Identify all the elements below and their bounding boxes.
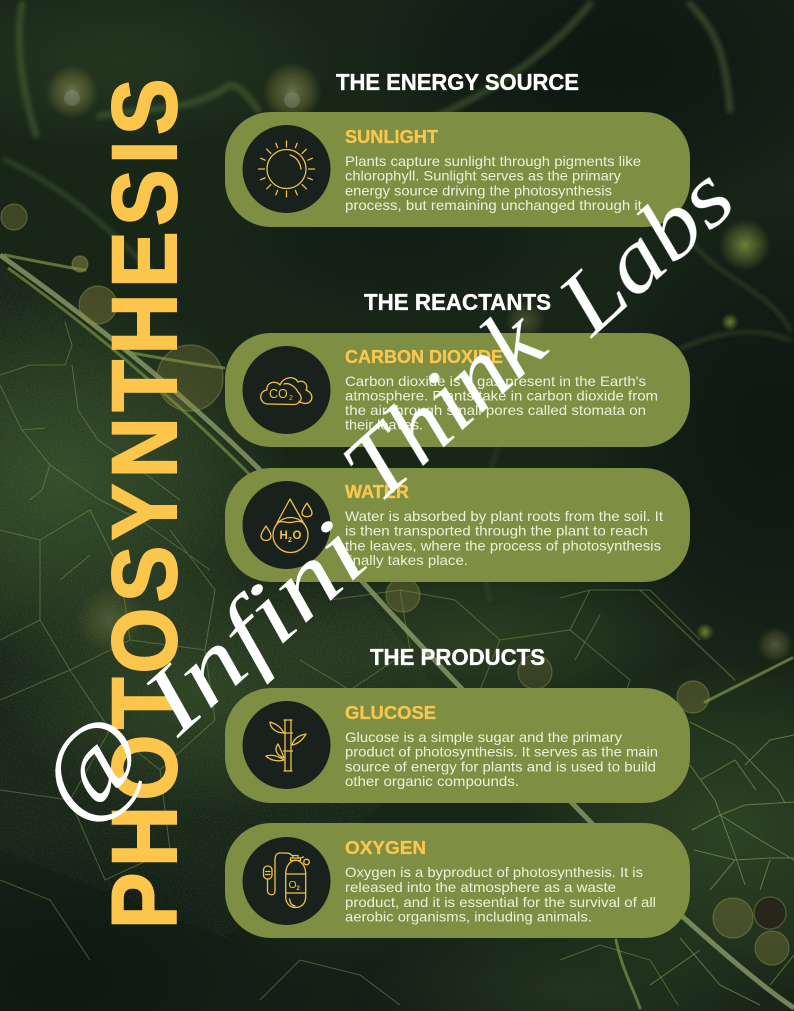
- text: glucose description: [345, 730, 658, 789]
- text: oxygen description: released into the atmosphere as a waste: [345, 880, 616, 895]
- watermark: @InfiniThink Labs: @: [14, 689, 168, 844]
- watermark: @InfiniThink Labs: Labs: [537, 147, 753, 354]
- text: oxygen description: Oxygen is a byproduct of photosynthesis. It is: [345, 865, 643, 880]
- text: carbon dioxide description: their leaves.: [345, 418, 423, 432]
- leaf veins: [0, 322, 215, 880]
- icon: CO2 cloud: [261, 378, 312, 404]
- panel: water: [225, 468, 690, 582]
- text: glucose description: Glucose is a simple sugar and the primary: [345, 730, 622, 745]
- panel: sunlight: [225, 112, 690, 227]
- heading: the products: THE PRODUCTS: [370, 644, 545, 670]
- text: glucose description: product of photosynthesis. It serves as the main: [345, 745, 658, 760]
- text: water description: [345, 509, 663, 568]
- blurred stems: [5, 4, 790, 600]
- panel: oxygen: [225, 823, 690, 938]
- stems: [5, 255, 792, 1008]
- icon: H2O drops: H: [280, 530, 288, 542]
- text: carbon dioxide description: atmosphere. Plants take in carbon dioxide from: [345, 388, 658, 404]
- heading: the energy source: THE ENERGY SOURCE: [336, 69, 579, 95]
- text: carbon dioxide description: Carbon dioxide is a gas present in the Earth's: [345, 374, 646, 389]
- label: oxygen: OXYGEN: [345, 838, 426, 858]
- text: sunlight description: chlorophyll. Sunlight serves as the primary: [345, 169, 621, 184]
- text: water description: finally takes place.: [345, 553, 468, 568]
- label: sunlight: SUNLIGHT: [345, 127, 438, 147]
- label: carbon dioxide: CARBON DIOXIDE: [345, 347, 503, 367]
- main midrib: [0, 255, 794, 1008]
- text: water description: Water is absorbed by plant roots from the soil. It: [345, 509, 663, 524]
- watermark: @InfiniThink Labs: [14, 147, 753, 844]
- icon: H2O drops: [261, 499, 312, 552]
- label: glucose: GLUCOSE: [345, 703, 436, 723]
- icon: H2O drops: O: [292, 530, 302, 542]
- text: glucose description: other organic compounds.: [345, 774, 519, 789]
- label: water: WATER: [345, 482, 409, 502]
- text: carbon dioxide description: [345, 374, 658, 432]
- text: oxygen description: [345, 865, 656, 924]
- text: oxygen description: product, and it is essential for the survival of all: [345, 895, 656, 910]
- watermark: @InfiniThink Labs: Infini: [122, 501, 387, 754]
- icon: oxygen tank: O: [288, 879, 297, 891]
- text: sunlight description: energy source driving the photosynthesis: [345, 183, 612, 198]
- title: PHOTOSYNTHESIS vertical: PHOTOSYNTHESIS: [94, 73, 196, 929]
- icon: H2O drops: 2: [288, 537, 292, 544]
- text: carbon dioxide description: the air through small pores called stomata on: [345, 403, 646, 418]
- icon: bamboo: [266, 720, 306, 771]
- heading: the reactants: THE REACTANTS: [364, 289, 551, 315]
- text: sunlight description: [345, 154, 646, 213]
- panel: carbon dioxide: [225, 333, 690, 447]
- text: sunlight description: Plants capture sunlight through pigments like: [345, 154, 641, 169]
- text: water description: is then transported through the plant to reach: [345, 524, 648, 539]
- text: water description: the leaves, where the process of photosynthesis: [345, 538, 661, 553]
- text: glucose description: source of energy for plants and is used to build: [345, 759, 656, 774]
- panel: glucose: [225, 688, 690, 803]
- icon: CO2 cloud: CO: [269, 387, 288, 401]
- icon: oxygen tank: [264, 853, 309, 908]
- text: sunlight description: process, but remaining unchanged through it.: [345, 198, 646, 213]
- text: oxygen description: aerobic organisms, including animals.: [345, 910, 592, 924]
- watermark: @InfiniThink Labs: Think: [322, 287, 566, 522]
- icon: oxygen tank: 2: [296, 886, 300, 892]
- icon: sun: [258, 141, 314, 197]
- icon: CO2 cloud: 2: [289, 395, 293, 402]
